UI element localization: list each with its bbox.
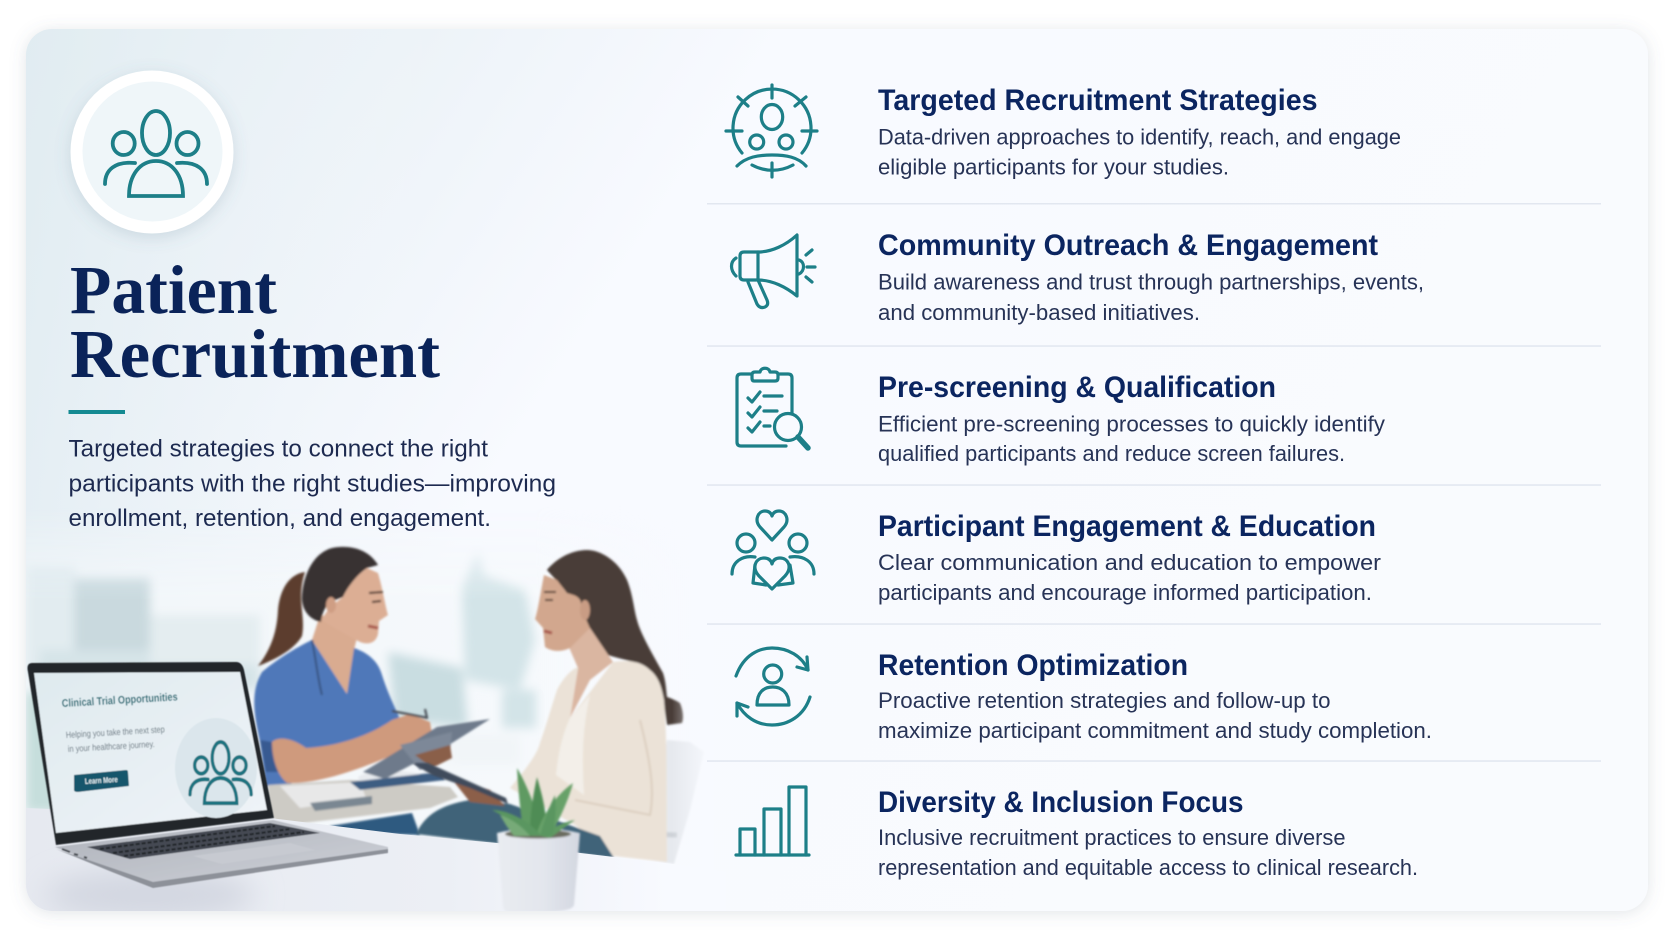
hand and tablet (454, 782, 506, 808)
row: Retention Optimization (736, 648, 1432, 743)
description (878, 124, 1401, 180)
intro text: enrollment, retention, and engagement. (68, 505, 491, 532)
pen (392, 709, 428, 718)
blurred window background (26, 557, 540, 809)
icon: bar chart (736, 787, 809, 855)
forearm (272, 714, 432, 783)
behind table (268, 780, 458, 826)
description: representation and equitable access to clinical research. (878, 855, 1418, 880)
screen circle (175, 718, 257, 818)
description: participants and encourage informed participation. (878, 580, 1372, 605)
face (535, 575, 590, 651)
heading: Patient Recruitment: Recruitment (70, 316, 440, 392)
description (878, 688, 1432, 743)
screen people icon (190, 742, 251, 803)
intro text: Targeted strategies to connect the right (68, 436, 488, 462)
photo: clinician and participant at table with laptop (26, 545, 696, 911)
description: Inclusive recruitment practices to ensure diverse (878, 825, 1346, 850)
intro text (68, 436, 556, 532)
laptop lid (28, 662, 274, 845)
title: Diversity & Inclusion Focus (878, 786, 1244, 819)
description: maximize participant commitment and study completion. (878, 718, 1432, 743)
screen button: Learn More (85, 775, 118, 786)
title: Retention Optimization (878, 649, 1188, 682)
title: Pre-screening & Qualification (878, 371, 1276, 404)
facial features (369, 592, 383, 602)
chair (666, 740, 696, 864)
description: and community-based initiatives. (878, 300, 1200, 325)
laptop screen (34, 672, 267, 833)
ponytail (258, 572, 305, 666)
row: Pre-screening & Qualification (737, 368, 1385, 466)
right fade over photo (672, 520, 714, 912)
icon: people group (105, 111, 207, 196)
title: Community Outreach & Engagement (878, 229, 1378, 262)
neck (568, 625, 613, 718)
description: Proactive retention strategies and follow-up to (878, 688, 1330, 713)
screen text line 1: Helping you take the next step (66, 724, 165, 740)
hair front (564, 588, 582, 601)
description: eligible participants for your studies. (878, 154, 1229, 180)
pot (497, 828, 580, 912)
row: Diversity & Inclusion Focus (736, 786, 1418, 880)
laptop (28, 662, 388, 888)
panel: strategies list (707, 84, 1601, 880)
keyboard (87, 823, 320, 859)
ear (580, 600, 590, 620)
description: Efficient pre-screening processes to quickly identify (878, 412, 1385, 436)
laptop base (55, 820, 388, 887)
clipboard (363, 719, 490, 779)
icon: target with people (726, 85, 817, 177)
intro text: participants with the right studies—improving (68, 470, 556, 498)
icon: cycle arrows around person (736, 648, 810, 725)
ear (326, 597, 336, 613)
row: Participant Engagement & Education (732, 510, 1381, 605)
description (878, 550, 1381, 605)
heading: Patient Recruitment (70, 252, 440, 392)
title: Participant Engagement & Education (878, 510, 1376, 543)
screen button (74, 770, 129, 792)
panel: left column (26, 29, 726, 921)
facial features (544, 592, 556, 600)
description: Clear communication and education to empower (878, 550, 1381, 575)
icon: checklist with magnifier (737, 368, 808, 448)
hair back (547, 550, 683, 725)
title: Targeted Recruitment Strategies (878, 84, 1318, 117)
row: Community Outreach & Engagement (732, 229, 1424, 325)
scrub top (254, 640, 402, 786)
face (322, 568, 388, 643)
hair (302, 547, 378, 622)
neck (312, 615, 360, 694)
description: qualified participants and reduce screen failures. (878, 441, 1345, 466)
plant (492, 768, 580, 912)
participant (412, 550, 704, 864)
foreground table (26, 808, 615, 911)
description (878, 270, 1424, 325)
description: Data-driven approaches to identify, reach, and engage (878, 124, 1401, 150)
heading: Patient Recruitment: Patient (70, 252, 277, 328)
trackpad (198, 849, 250, 858)
leaves (492, 768, 575, 838)
cardigan (510, 661, 667, 862)
screen title: Clinical Trial Opportunities (61, 691, 178, 710)
ports (62, 849, 87, 858)
description (878, 825, 1418, 880)
description: Build awareness and trust through partnerships, events, (878, 270, 1424, 294)
clinician (254, 547, 490, 835)
jeans (416, 800, 614, 858)
row: Targeted Recruitment Strategies (726, 84, 1401, 180)
description (878, 412, 1385, 466)
icon: megaphone (732, 235, 815, 308)
screen text line 2: in your healthcare journey. (68, 739, 155, 754)
icon: people with hearts (732, 511, 814, 589)
accent rule (68, 410, 125, 414)
badge: people icon circle (70, 70, 234, 234)
